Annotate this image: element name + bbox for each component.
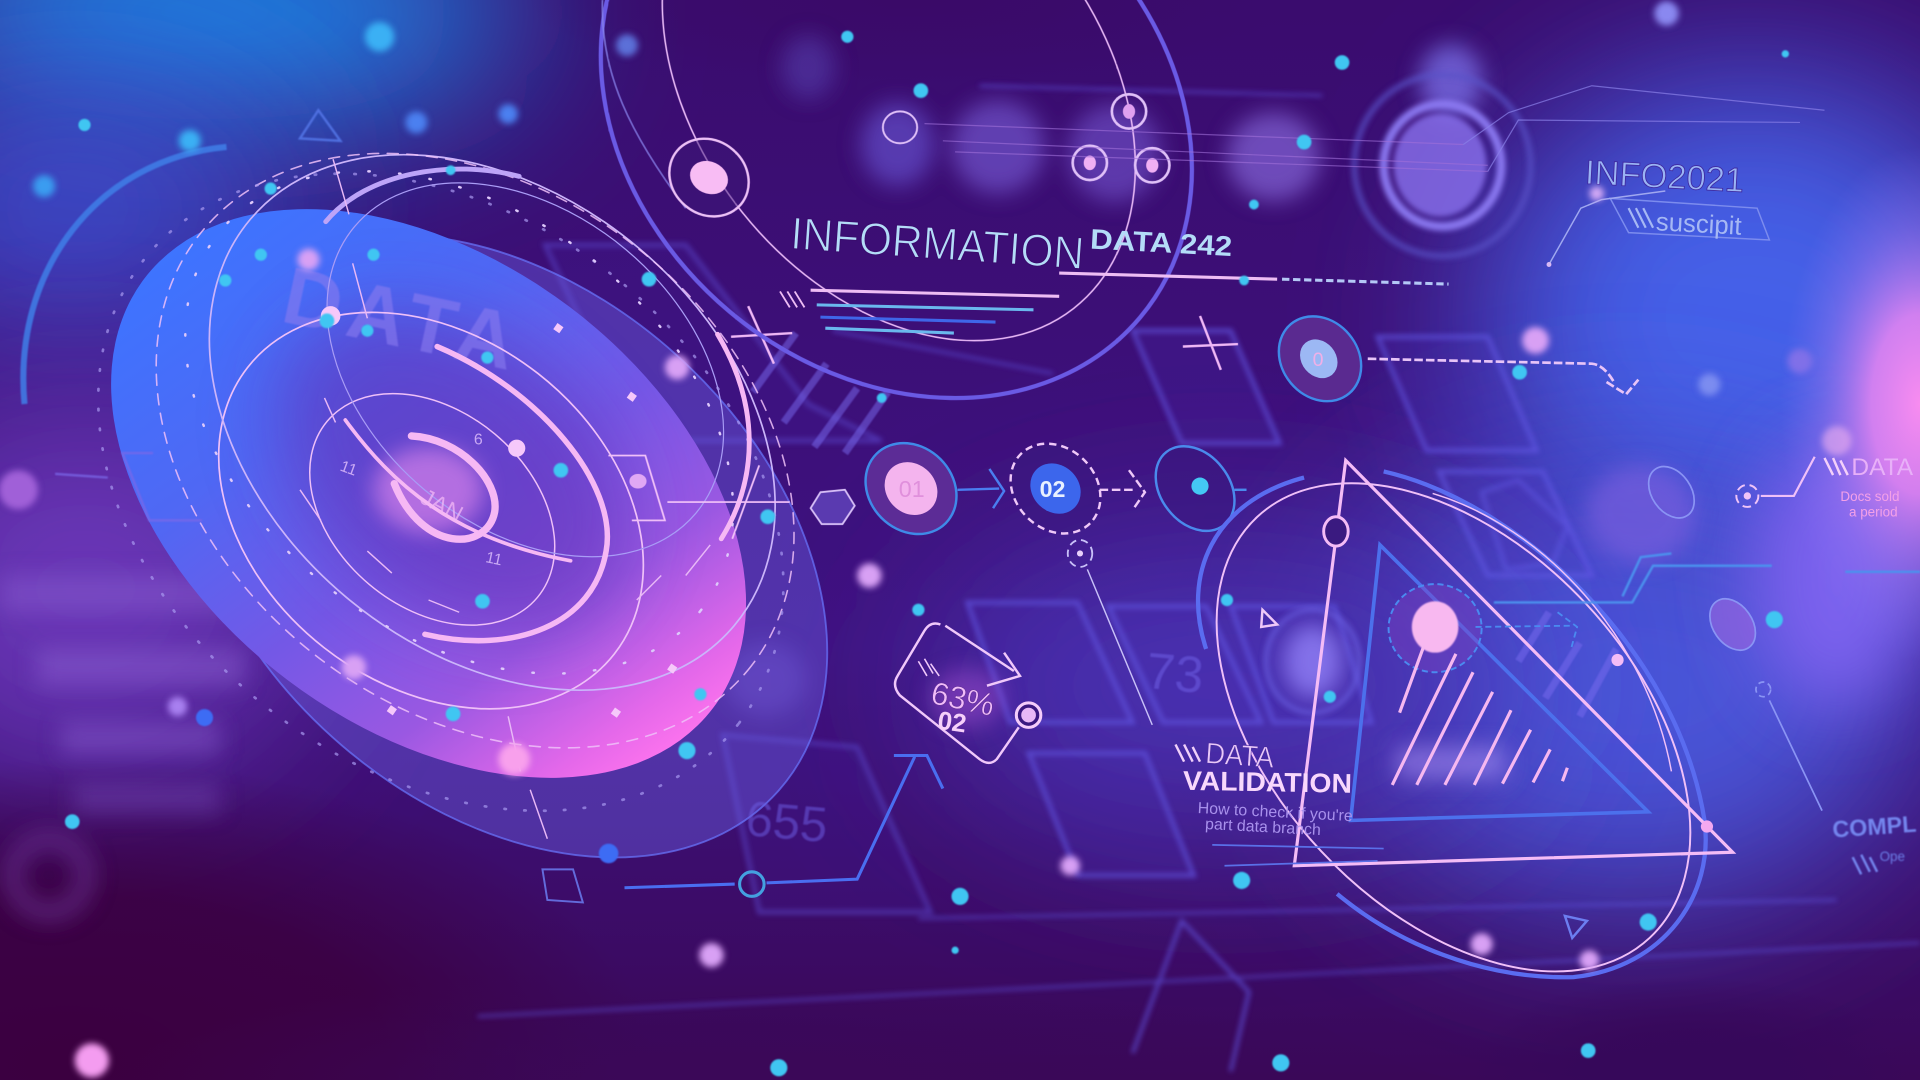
triangle hatching bbox=[1392, 645, 1567, 785]
data validation text: part data branch bbox=[1205, 816, 1321, 839]
blurred target bbox=[1266, 75, 1531, 713]
dial labels: JAN bbox=[416, 483, 467, 527]
faint data label: DATA bbox=[275, 250, 531, 389]
data validation text bbox=[1176, 737, 1384, 866]
node: 02 bbox=[992, 425, 1119, 552]
node: 0 bbox=[1262, 300, 1378, 418]
node: 03 bbox=[1139, 431, 1251, 546]
node: 01: 01 bbox=[899, 476, 925, 502]
inner darker haze bbox=[216, 245, 690, 698]
info2021 label: suscipit bbox=[1655, 208, 1742, 241]
hexagon bbox=[811, 490, 855, 524]
right side circles bbox=[1639, 458, 1822, 811]
badge: 63% 02 bbox=[895, 623, 1041, 763]
badge: 63% 02: 63% bbox=[928, 674, 998, 723]
data validation text: DATA bbox=[1204, 737, 1275, 775]
right label: data bbox=[1736, 454, 1914, 520]
left bracket bbox=[55, 453, 202, 520]
dial tick marks bbox=[300, 159, 710, 839]
node: 01 bbox=[847, 424, 975, 553]
info2021 label bbox=[1463, 86, 1824, 267]
small nodes bbox=[883, 94, 1488, 182]
triangle target dot bbox=[1389, 584, 1577, 672]
arrow 02 to 03 bbox=[1100, 470, 1145, 508]
blurred data blobs bbox=[0, 36, 1506, 912]
left arc bbox=[23, 147, 227, 404]
right label: data: DATA bbox=[1851, 454, 1914, 481]
node: main top bbox=[653, 123, 764, 232]
faint number 655: 655 bbox=[744, 792, 830, 853]
back ellipse bbox=[59, 109, 950, 983]
right label: data: Docs sold bbox=[1840, 489, 1899, 504]
dial rings bbox=[0, 30, 911, 943]
hatch panel bbox=[753, 333, 1616, 716]
right label: compl bbox=[1832, 811, 1917, 874]
dial thick arcs bbox=[326, 169, 749, 641]
top large rings bbox=[486, 0, 1307, 516]
bracket marker bbox=[609, 456, 790, 539]
right zigzag line bbox=[1494, 553, 1920, 602]
info2021 label: INFO2021 bbox=[1584, 154, 1745, 200]
front gradient ellipse bbox=[3, 92, 854, 895]
badge: 63% 02: 02 bbox=[936, 707, 968, 738]
heading: information data 242: DATA 242 bbox=[1089, 224, 1233, 262]
faint number 73: 73 bbox=[1144, 641, 1206, 704]
triangle graphic bbox=[1125, 393, 1782, 1061]
particles: deep blue bbox=[196, 709, 618, 863]
text lines under heading bbox=[780, 273, 1449, 333]
dial labels: 11 bbox=[338, 458, 359, 480]
heading: information data 242: INFORMATION bbox=[789, 208, 1086, 279]
leader line bbox=[1068, 540, 1152, 725]
dial labels: 6 bbox=[474, 431, 483, 448]
dial labels bbox=[338, 431, 504, 569]
square marker bbox=[542, 869, 583, 902]
dial labels: 11 bbox=[484, 549, 504, 569]
background panels bbox=[478, 86, 1920, 1071]
data validation text: How to check if you're bbox=[1197, 800, 1353, 825]
right label: compl: Ope bbox=[1880, 849, 1905, 864]
up arrow chart bbox=[624, 756, 943, 896]
dashed arrow bbox=[1368, 359, 1638, 394]
crosses bbox=[731, 306, 1238, 370]
node: 02: 02 bbox=[1040, 476, 1065, 502]
dial dots bbox=[321, 306, 677, 718]
right label: data: a period bbox=[1849, 505, 1898, 520]
node: 0: 0 bbox=[1313, 349, 1324, 371]
arrow 01 to 02 bbox=[958, 469, 1004, 508]
data validation text: VALIDATION bbox=[1183, 766, 1352, 799]
small triangle top bbox=[300, 110, 340, 141]
right label: compl: COMPL bbox=[1832, 811, 1917, 843]
